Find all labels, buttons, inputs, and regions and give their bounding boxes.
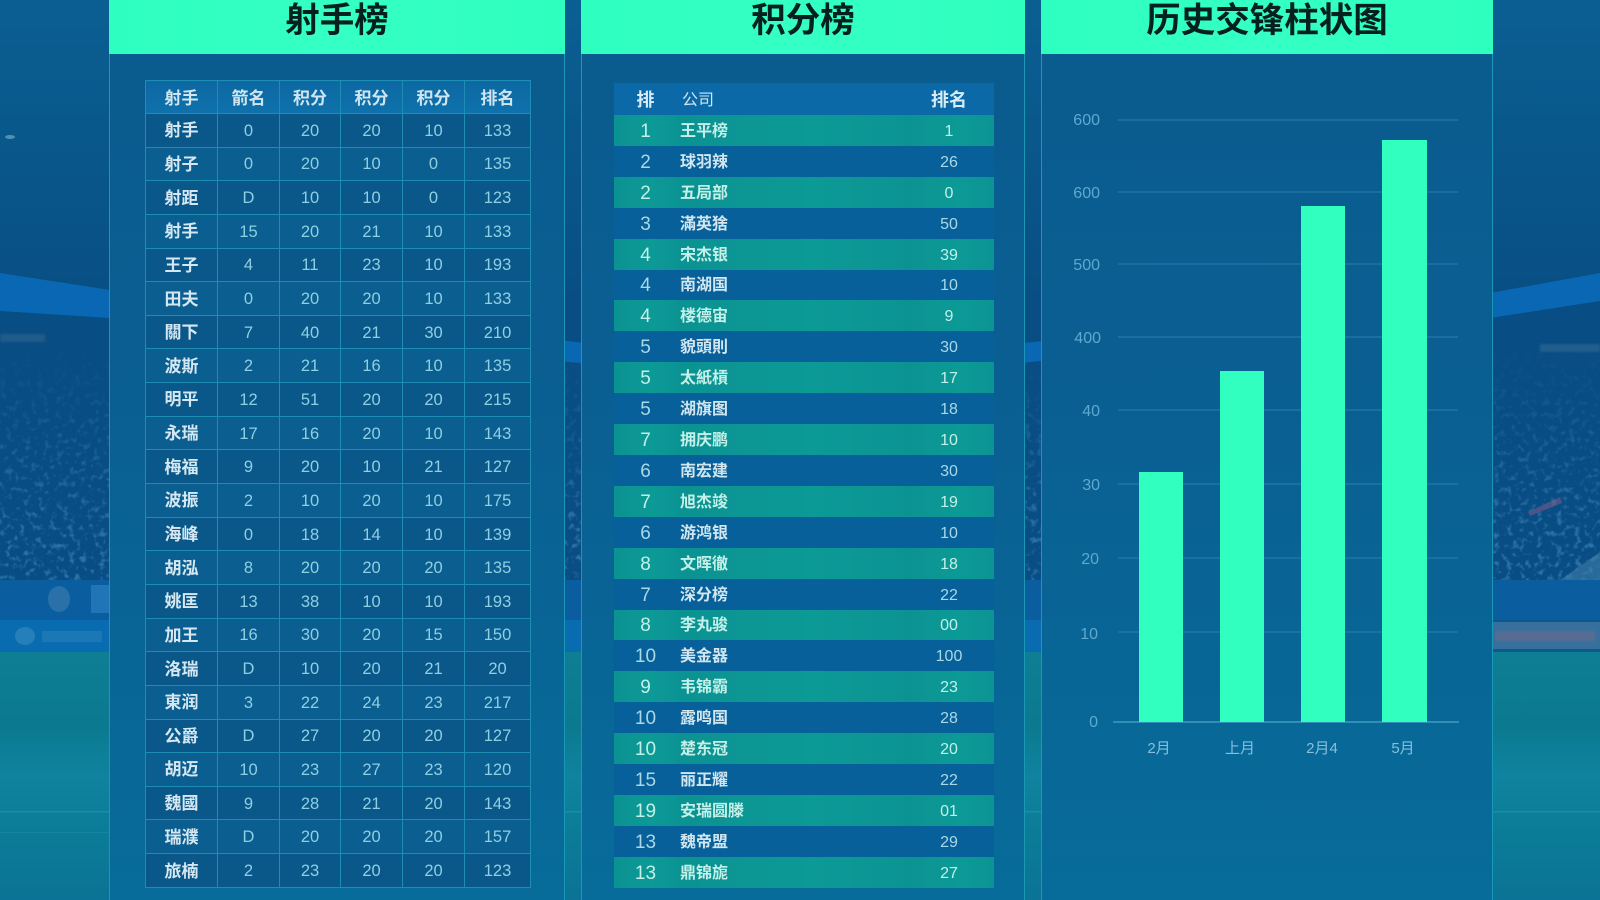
- standings rows: 22: [940, 772, 958, 789]
- standings rows: 5: [640, 337, 651, 358]
- scorer rows: 20: [362, 492, 381, 510]
- standings rows: 30: [940, 339, 958, 356]
- scorer rows: 135: [484, 155, 511, 173]
- scorer rows: 20: [362, 626, 381, 644]
- table header row: [614, 83, 994, 115]
- x axis labels: 2月4: [1306, 740, 1338, 757]
- standings rows: 17: [940, 370, 958, 387]
- standings rows: 8: [640, 554, 651, 575]
- standings rows: 1: [640, 121, 651, 142]
- scorer rows: 127: [484, 727, 511, 745]
- scorer rows: D: [243, 660, 254, 678]
- scorer rows: [146, 121, 530, 887]
- scorer rows: 193: [484, 593, 511, 611]
- scorer rows: 14: [362, 526, 381, 544]
- scorer rows: 4: [244, 256, 253, 274]
- scorer rows: 瑞濮: [164, 828, 198, 847]
- scorer rows: 10: [424, 357, 443, 375]
- standings rows: 28: [940, 710, 958, 727]
- scorer rows: 23: [424, 761, 443, 779]
- scorer rows: 22: [301, 694, 319, 712]
- scorer rows: 10: [424, 290, 443, 308]
- scorer rows: 20: [301, 155, 319, 173]
- scorer rows: 20: [488, 660, 507, 678]
- standings rows: 拥庆鹏: [680, 432, 728, 449]
- table header row: 积分: [416, 88, 450, 108]
- scorer rows: 123: [484, 862, 511, 880]
- scorer rows: 135: [484, 559, 511, 577]
- scorer rows: 10: [424, 122, 443, 140]
- standings rows: 魏帝盟: [680, 834, 728, 851]
- scorer rows: 田夫: [164, 290, 198, 309]
- scorer rows: 20: [362, 862, 381, 880]
- standings rows: 6: [640, 523, 651, 544]
- standings rows: 27: [940, 865, 958, 882]
- scorer rows: 胡迈: [164, 760, 198, 779]
- scorer rows: 133: [484, 122, 511, 140]
- standings rows: 1: [945, 123, 953, 140]
- scorer rows: D: [243, 189, 254, 207]
- standings rows: 9: [640, 677, 651, 698]
- standings rows: 5: [640, 399, 651, 420]
- scorer rows: 21: [362, 324, 381, 342]
- x axis labels: 2月: [1147, 740, 1171, 757]
- scorer rows: 10: [424, 593, 443, 611]
- x axis labels: 上月: [1225, 740, 1255, 757]
- scorer rows: 姚匡: [164, 592, 198, 611]
- table header row: 射手: [164, 88, 198, 108]
- standings rows: 30: [940, 463, 958, 480]
- standings rows: 6: [640, 461, 651, 482]
- panel: head-to-head bar chart: [1041, 0, 1493, 900]
- standings rows: 球羽辣: [680, 154, 728, 171]
- standings rows: 5: [640, 368, 651, 389]
- scorer rows: 157: [484, 828, 511, 846]
- scorer rows: 0: [244, 155, 253, 173]
- scorer rows: 10: [424, 256, 443, 274]
- standings rows: 26: [940, 154, 958, 171]
- scorer rows: 139: [484, 526, 511, 544]
- scorer rows: 17: [239, 425, 258, 443]
- scorer rows: 20: [301, 559, 319, 577]
- scorer rows: 150: [484, 626, 511, 644]
- standings rows: 韦锦霸: [680, 679, 728, 696]
- scorer rows: 16: [301, 425, 319, 443]
- table header row: 排: [636, 90, 654, 110]
- standings rows: 丽正耀: [680, 772, 728, 789]
- scorer rows: 10: [362, 458, 381, 476]
- x axis labels: 5月: [1391, 740, 1415, 757]
- y axis labels: 500: [1073, 257, 1100, 274]
- scorer rows: 30: [301, 626, 319, 644]
- scorer rows: 27: [362, 761, 381, 779]
- scorer rows: 射子: [164, 155, 198, 174]
- standings rows: 10: [635, 739, 656, 760]
- scorer rows: 9: [244, 458, 253, 476]
- standings rows: 湖旗图: [680, 401, 728, 418]
- scorer rows: 射手: [164, 222, 198, 241]
- scorer rows: 143: [484, 795, 511, 813]
- scorer rows: 20: [424, 727, 443, 745]
- standings rows: 7: [640, 430, 651, 451]
- scorer rows: 王子: [164, 256, 198, 275]
- table header row: 积分: [293, 88, 327, 108]
- standings rows: 13: [635, 832, 656, 853]
- y axis labels: 400: [1074, 330, 1101, 347]
- standings rows: 鼎锦旎: [680, 865, 728, 882]
- standings rows: 李丸骏: [680, 617, 728, 634]
- table header row: 公司: [682, 92, 714, 108]
- standings rows: 2: [640, 183, 651, 204]
- scorer rows: 51: [301, 391, 319, 409]
- standings rows: 南宏建: [680, 463, 728, 480]
- scorer rows: 133: [484, 290, 511, 308]
- scorer rows: 2: [244, 862, 253, 880]
- standings rows: 22: [940, 587, 958, 604]
- scorer rows: 波振: [164, 491, 198, 510]
- scorer rows: 11: [301, 256, 319, 274]
- standings rows: 10: [635, 708, 656, 729]
- standings rows: 00: [940, 617, 958, 634]
- scorer rows: 20: [362, 727, 381, 745]
- scorer rows: 12: [239, 391, 258, 409]
- table header row: [146, 81, 530, 113]
- scorer rows: 0: [244, 526, 253, 544]
- standings rows: 18: [940, 401, 958, 418]
- scorer rows: 23: [362, 256, 381, 274]
- scorer rows: 梅福: [164, 458, 198, 477]
- y axis labels: 10: [1080, 626, 1098, 643]
- heading: scorers: [109, 0, 565, 54]
- scorer rows: 射手: [164, 121, 198, 140]
- scorer rows: 3: [244, 694, 253, 712]
- scorer rows: 10: [239, 761, 258, 779]
- scorer rows: 20: [301, 122, 319, 140]
- standings rows: 五局部: [680, 185, 728, 202]
- x axis labels: [1147, 740, 1415, 757]
- scorer rows: 21: [424, 660, 443, 678]
- scorer rows: 193: [484, 256, 511, 274]
- scorer rows: 143: [484, 425, 511, 443]
- scorer rows: 20: [424, 391, 443, 409]
- scorer rows: 10: [424, 223, 443, 241]
- standings rows: 13: [635, 863, 656, 884]
- scorer rows: 21: [362, 795, 381, 813]
- y axis labels: 600: [1073, 112, 1100, 129]
- scorer rows: 海峰: [164, 525, 198, 544]
- standings rows: 安瑞圆滕: [680, 803, 744, 820]
- standings rows: 王平榜: [680, 123, 728, 140]
- scorer rows: 10: [362, 189, 381, 207]
- standings rows: 01: [940, 803, 958, 820]
- standings rows: 楚东冠: [680, 741, 728, 758]
- scorer rows: 旅楠: [164, 862, 198, 881]
- scorer rows: 210: [484, 324, 511, 342]
- bars: [1139, 140, 1427, 722]
- standings rows: 15: [635, 770, 656, 791]
- y axis labels: 20: [1081, 551, 1099, 568]
- standings rows: 29: [940, 834, 958, 851]
- scorer rows: 東润: [164, 693, 198, 712]
- scorer rows: 23: [301, 862, 319, 880]
- scorer rows: 215: [484, 391, 511, 409]
- y axis labels: 40: [1082, 403, 1100, 420]
- scorer rows: 13: [239, 593, 258, 611]
- heading: standings: [581, 0, 1025, 54]
- scorer rows: 20: [362, 391, 381, 409]
- standings rows: 0: [945, 185, 953, 202]
- panel: standings: [581, 0, 1025, 900]
- scorer rows: 21: [362, 223, 381, 241]
- scorer rows: 20: [301, 290, 319, 308]
- y axis labels: [1073, 112, 1101, 731]
- scorer rows: 0: [429, 189, 438, 207]
- standings rows: 美金器: [680, 648, 728, 665]
- standings rows: 楼德宙: [680, 308, 728, 325]
- scorer rows: 38: [301, 593, 319, 611]
- standings rows: 滿英猞: [680, 216, 728, 233]
- scorer rows: 0: [244, 290, 253, 308]
- standings rows: 10: [940, 525, 958, 542]
- scorer rows: 16: [362, 357, 381, 375]
- scorer rows: 28: [301, 795, 319, 813]
- scorer rows: D: [243, 727, 254, 745]
- panel: scorers: [109, 0, 565, 900]
- scorer rows: 公爵: [164, 727, 198, 746]
- standings rows: 23: [940, 679, 958, 696]
- scorer rows: 18: [301, 526, 319, 544]
- scorer rows: 10: [362, 155, 381, 173]
- scorer rows: 135: [484, 357, 511, 375]
- standings rows: 7: [640, 492, 651, 513]
- scorer rows: 20: [424, 828, 443, 846]
- y axis labels: 600: [1073, 185, 1100, 202]
- standings rows: 貌頭則: [680, 339, 728, 356]
- scorer rows: 20: [424, 795, 443, 813]
- scorer rows: 23: [424, 694, 443, 712]
- scorer rows: 27: [301, 727, 319, 745]
- scorer rows: 洛瑞: [164, 660, 198, 679]
- standings rows: 10: [940, 277, 958, 294]
- scorer rows: 15: [239, 223, 258, 241]
- table header row: 排名: [480, 88, 514, 108]
- scorer rows: 10: [424, 526, 443, 544]
- scorer rows: 20: [362, 828, 381, 846]
- y axis labels: 30: [1082, 477, 1100, 494]
- standings rows: 4: [640, 306, 651, 327]
- scorer rows: 20: [424, 862, 443, 880]
- standings rows: 旭杰竣: [680, 494, 728, 511]
- heading: scorers: 射手榜: [285, 2, 389, 40]
- standings rows: 19: [635, 801, 656, 822]
- standings rows: 深分榜: [680, 587, 728, 604]
- heading: standings: 积分榜: [751, 2, 855, 40]
- baseline axis: [1113, 721, 1459, 723]
- scorer rows: 20: [301, 828, 319, 846]
- scorer rows: 0: [244, 122, 253, 140]
- heading: head-to-head bar chart: 历史交锋柱状图: [1146, 2, 1388, 40]
- standings rows: 19: [940, 494, 958, 511]
- scorer rows: 21: [301, 357, 319, 375]
- scorer rows: 20: [362, 660, 381, 678]
- scorer rows: 217: [484, 694, 511, 712]
- scorer rows: 40: [301, 324, 319, 342]
- standings rows: 露鸣国: [680, 710, 728, 727]
- standings rows: 8: [640, 615, 651, 636]
- standings rows: 18: [940, 556, 958, 573]
- scorer rows: 10: [301, 660, 319, 678]
- table header row: 排名: [931, 90, 967, 110]
- standings rows: 10: [635, 646, 656, 667]
- scorer rows: 133: [484, 223, 511, 241]
- scorer rows: 20: [362, 122, 381, 140]
- scorer rows: 20: [301, 458, 319, 476]
- scorer rows: 20: [362, 559, 381, 577]
- scorer rows: 永瑞: [164, 424, 198, 443]
- scorer rows: 明平: [164, 390, 198, 409]
- standings rows: [614, 115, 994, 888]
- scorer rows: 20: [424, 559, 443, 577]
- scorer rows: 23: [301, 761, 319, 779]
- scorer rows: 24: [362, 694, 381, 712]
- standings rows: 游鸿银: [680, 525, 728, 542]
- standings rows: 4: [640, 245, 651, 266]
- standings rows: 50: [940, 216, 958, 233]
- scorer rows: 21: [424, 458, 443, 476]
- standings rows: 20: [940, 741, 958, 758]
- scorer rows: 15: [424, 626, 443, 644]
- scorer rows: 123: [484, 189, 511, 207]
- scorer rows: 16: [239, 626, 258, 644]
- scorer rows: 加王: [164, 626, 198, 645]
- scorer rows: 7: [244, 324, 253, 342]
- scorer rows: 9: [244, 795, 253, 813]
- scorer rows: 30: [424, 324, 443, 342]
- scorer rows: 波斯: [164, 357, 198, 376]
- standings rows: 10: [940, 432, 958, 449]
- standings rows: 3: [640, 214, 651, 235]
- scorer rows: 關下: [164, 323, 198, 342]
- y axis labels: 0: [1089, 714, 1098, 731]
- scorer rows: 127: [484, 458, 511, 476]
- scorer rows: 20: [362, 290, 381, 308]
- grid lines: [1118, 120, 1458, 632]
- scorer rows: 120: [484, 761, 511, 779]
- standings rows: 太紙槓: [680, 370, 728, 387]
- scorer rows: 175: [484, 492, 511, 510]
- scorer rows: 10: [424, 492, 443, 510]
- heading: head-to-head bar chart: [1041, 0, 1493, 54]
- scorer rows: 0: [429, 155, 438, 173]
- scorer rows: 2: [244, 357, 253, 375]
- scorer rows: 胡泓: [164, 559, 198, 578]
- scorer rows: 射距: [164, 189, 198, 208]
- standings rows: 文晖徹: [680, 556, 728, 573]
- standings rows: 7: [640, 585, 651, 606]
- table header row: 积分: [354, 88, 388, 108]
- standings rows: 100: [936, 648, 962, 665]
- standings rows: 南湖国: [680, 277, 728, 294]
- scorer rows: 10: [362, 593, 381, 611]
- scorer rows: 魏國: [164, 794, 198, 813]
- scorer rows: 10: [301, 492, 319, 510]
- scorer rows: 2: [244, 492, 253, 510]
- scorer rows: 20: [362, 425, 381, 443]
- standings rows: 39: [940, 247, 958, 264]
- scorer rows: 10: [301, 189, 319, 207]
- table header row: 箭名: [232, 88, 266, 108]
- scorer rows: 10: [424, 425, 443, 443]
- table: standings: [614, 83, 994, 888]
- standings rows: 4: [640, 275, 651, 296]
- table: scorers: [145, 80, 531, 888]
- scorer rows: 8: [244, 559, 253, 577]
- scorer rows: 20: [301, 223, 319, 241]
- scorer rows: D: [243, 828, 254, 846]
- standings rows: 2: [640, 152, 651, 173]
- standings rows: 9: [945, 308, 953, 325]
- standings rows: 宋杰银: [680, 247, 728, 264]
